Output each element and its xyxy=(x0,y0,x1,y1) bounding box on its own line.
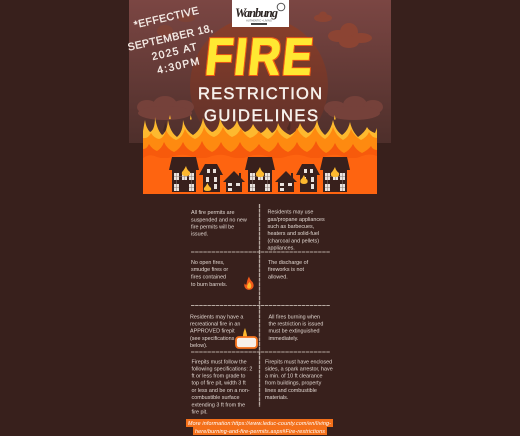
text: extinguish: the restriction is issued xyxy=(268,322,323,328)
text: appliances: such as barbecues, xyxy=(268,224,315,230)
text: permits suspended: All fire permits are xyxy=(191,210,234,216)
divider lines xyxy=(191,204,330,407)
embers xyxy=(169,115,336,120)
text: firepit enclosure: from buildings, property xyxy=(265,381,322,387)
text: no open fires: to burn barrels. xyxy=(191,282,227,288)
text: permits suspended: fire permits will be xyxy=(191,224,234,230)
logo xyxy=(232,0,289,27)
logo: Wanbung xyxy=(235,6,278,20)
title: guidelines: GUIDELINES xyxy=(204,107,318,125)
text: appliances: appliances. xyxy=(268,246,295,252)
text: firepit specifications: or less and be on a non- xyxy=(192,388,250,394)
text: no open fires: fires contained xyxy=(191,275,226,281)
text: recreational fire: below). xyxy=(190,343,207,349)
text: permits suspended: issued. xyxy=(191,232,208,238)
text: firepit enclosure: a min. of 10 ft clearance xyxy=(265,374,323,380)
footer link: More information:https://www.leduc-county.com/en/living- xyxy=(188,421,331,427)
logo: AUTHENTIC • LIVING xyxy=(246,18,272,22)
icon: candle firepit xyxy=(236,328,257,348)
text: no open fires: smudge fires or xyxy=(191,267,228,273)
footer link xyxy=(186,419,333,435)
effective date: 4:30PM xyxy=(156,55,201,77)
text: firepit specifications: ft or less from grade to xyxy=(192,374,245,380)
text: firepit enclosure: sides, a spark arrestor, have xyxy=(265,366,333,372)
effective date: 2025 AT xyxy=(151,41,199,63)
footer link: here/burning-and-fire-permits.aspx#Fire-restrictions xyxy=(195,429,325,435)
text: extinguish: immediately. xyxy=(268,336,298,342)
text: appliances: (charcoal and pellets) xyxy=(268,238,319,244)
text: recreational fire: recreational fire in an xyxy=(190,322,240,328)
effective date: *EFFECTIVE xyxy=(133,5,200,31)
wall of flames xyxy=(143,115,377,194)
title: restriction: RESTRICTION xyxy=(198,85,322,103)
sun circle xyxy=(190,17,328,155)
text: firepit enclosure: lines and combustible xyxy=(265,388,317,394)
house fires xyxy=(182,166,339,191)
effective date xyxy=(127,5,214,77)
houses xyxy=(169,157,350,192)
text: firepit specifications: following specifications: 2 xyxy=(192,366,252,372)
text: firepit specifications: fire pit. xyxy=(192,410,208,416)
text: extinguish: must be extinguished xyxy=(268,329,319,335)
text: firepit specifications: top of fire pit, width 3 ft xyxy=(192,381,246,387)
text: firepit specifications: extending 3 ft from the xyxy=(192,402,245,408)
text: fireworks: The discharge of xyxy=(268,260,309,266)
clouds xyxy=(137,12,383,120)
text: no open fires: No open fires, xyxy=(191,260,225,266)
icon: flame xyxy=(244,276,254,290)
text: firepit specifications: Firepits must follow the xyxy=(192,359,247,365)
text: appliances: heaters and solid-fuel xyxy=(268,231,319,237)
text: extinguish: All fires burning when xyxy=(268,314,320,320)
title: FIRE: FIRE xyxy=(203,28,315,86)
text: recreational fire: Residents may have a xyxy=(190,314,243,320)
text: firepit enclosure: Firepits must have enclosed xyxy=(265,359,332,365)
text: recreational fire: (see specifications xyxy=(190,336,235,342)
text: permits suspended: suspended and no new xyxy=(191,218,247,224)
text: appliances: gas/propane appliances xyxy=(268,217,325,223)
text: fireworks: allowed. xyxy=(268,275,288,281)
text: firepit enclosure: materials. xyxy=(265,395,288,401)
text: recreational fire: APPROVED firepit xyxy=(190,329,235,335)
top sky panel xyxy=(129,0,391,155)
text: fireworks: fireworks is not xyxy=(268,267,304,273)
text: appliances: Residents may use xyxy=(268,210,313,216)
text: firepit specifications: combustible surface xyxy=(192,395,239,401)
effective date: SEPTEMBER 18, xyxy=(127,22,214,54)
